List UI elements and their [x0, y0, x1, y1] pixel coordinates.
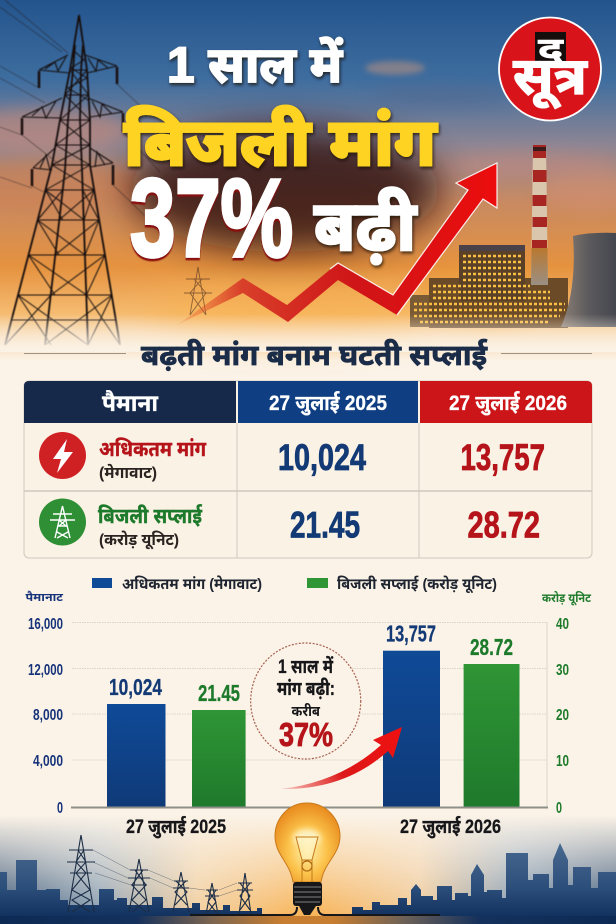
value: 13,757: 13,757 — [460, 437, 545, 478]
value: 10,024: 10,024 — [278, 437, 366, 478]
legend: बिजली सप्लाई (करोड़ यूनिट) — [337, 575, 497, 594]
left axis ticks: 8,000 — [33, 707, 63, 724]
table header: 2026 — [420, 381, 592, 423]
bar label: 28.72: 28.72 — [470, 634, 513, 660]
logo: The Sootr — [499, 18, 601, 120]
callout: 37% growth: 37% — [279, 716, 333, 753]
table header: 2025 — [238, 381, 418, 423]
icon: cooling tower — [561, 233, 616, 327]
hero background: sunset sky — [0, 0, 616, 360]
bottom skyline background — [0, 815, 616, 924]
row label: peak demand: (मेगावाट) — [99, 463, 157, 482]
icon: transmission tower large — [0, 0, 160, 345]
table header: metric — [24, 381, 236, 423]
bar label: 21.45: 21.45 — [198, 680, 240, 706]
table header: 2025: 27 जुलाई 2025 — [269, 391, 387, 416]
title: line 2: बिजली मांग — [124, 105, 437, 179]
pylon 5 — [237, 873, 253, 914]
logo: The Sootr: द — [538, 31, 564, 67]
logo: The Sootr: सूत्र — [513, 48, 589, 109]
table header: metric: पैमाना — [102, 390, 159, 416]
subtitle: बढ़ती मांग बनाम घटती सप्लाई — [141, 339, 488, 372]
left axis ticks: 4,000 — [33, 753, 63, 770]
icon: distant small tower — [184, 267, 212, 315]
title: line 3 word: बढ़ी — [314, 187, 417, 265]
left axis ticks: 12,000 — [28, 662, 63, 679]
icon: light bulb — [190, 803, 440, 915]
callout: 37% growth — [251, 643, 361, 759]
bar label: 10,024: 10,024 — [109, 674, 162, 700]
comparison table — [24, 381, 592, 558]
row label: peak demand: अधिकतम मांग — [99, 437, 207, 461]
callout: 37% growth: 1 साल में — [278, 655, 334, 678]
x label: 2025: 27 जुलाई 2025 — [126, 815, 226, 839]
left axis ticks: 0 — [57, 800, 63, 817]
bar: 2025 demand — [107, 704, 166, 807]
left axis title: पैमानाट — [26, 591, 64, 604]
power plant — [410, 245, 568, 328]
red rising arrow — [177, 163, 497, 325]
pylon 4 — [205, 883, 219, 914]
right axis ticks: 0 — [556, 800, 562, 817]
title: line 1: 1 साल में — [167, 37, 343, 93]
right axis ticks: 20 — [556, 707, 569, 724]
skyline silhouette right — [345, 843, 616, 916]
right axis ticks — [556, 616, 569, 817]
callout: 37% growth: करीब — [292, 703, 320, 719]
fade of hero into cream — [0, 314, 616, 352]
row label: electricity supply: (करोड़ यूनिट) — [99, 531, 179, 550]
bar label: 13,757: 13,757 — [386, 620, 436, 646]
right axis title: करोड़ यूनिट — [542, 590, 591, 606]
pylon 1 — [67, 835, 95, 912]
title: line 3 number: 37% — [130, 157, 293, 280]
left axis ticks: 16,000 — [28, 616, 63, 633]
row label: electricity supply — [98, 504, 203, 550]
icon: lightning — [39, 432, 86, 479]
x label: 2026: 27 जुलाई 2026 — [400, 815, 501, 839]
left axis ticks — [28, 616, 63, 817]
pylon 2 — [128, 859, 150, 912]
bar: 2025 supply — [192, 710, 246, 807]
value: 21.45: 21.45 — [290, 504, 360, 546]
pylons row — [67, 835, 253, 914]
legend — [92, 575, 497, 594]
icon: chimney — [531, 145, 548, 285]
pylon 3 — [173, 872, 189, 912]
row label: electricity supply: बिजली सप्लाई — [98, 504, 203, 528]
bar chart — [26, 590, 591, 839]
value: 28.72: 28.72 — [468, 504, 540, 546]
right axis ticks: 30 — [556, 662, 569, 679]
curved red arrow — [281, 727, 402, 789]
right axis ticks: 10 — [556, 753, 569, 770]
legend: अधिकतम मांग (मेगावाट) — [122, 575, 262, 593]
skyline silhouette left — [0, 860, 262, 916]
bar: 2026 demand — [383, 651, 440, 807]
bar: 2026 supply — [464, 664, 520, 807]
right axis ticks: 40 — [556, 616, 569, 633]
row label: peak demand — [99, 437, 207, 482]
icon: pylon in green circle — [39, 498, 86, 546]
table header: 2026: 27 जुलाई 2026 — [449, 391, 567, 416]
callout: 37% growth: मांग बढ़ी: — [277, 678, 335, 700]
